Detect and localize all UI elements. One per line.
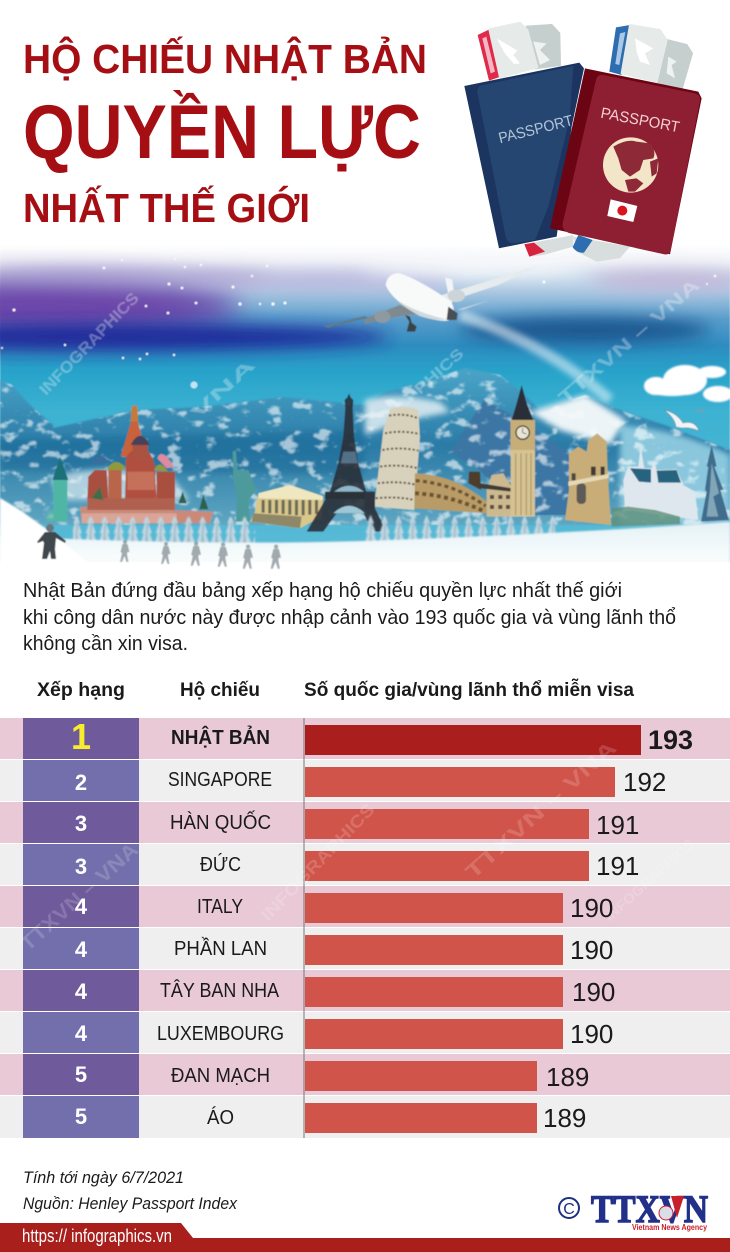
- title: [23, 36, 427, 231]
- visa-free values: 191: [596, 851, 639, 881]
- Eiffel Tower: [307, 393, 387, 532]
- table header: Số quốc gia/vùng lãnh thổ miễn visa: [304, 679, 634, 701]
- pine tree: [701, 445, 729, 522]
- copyright symbol: [559, 1198, 579, 1218]
- banner watermarks: TTXVN – VNA: [555, 275, 703, 408]
- title line 2: QUYỀN LỰC: [23, 90, 421, 175]
- visa-free values: 190: [570, 893, 613, 923]
- footnote: Nguồn: Henley Passport Index: [23, 1194, 237, 1213]
- passport country names: SINGAPORE: [168, 769, 272, 791]
- footnote: Tính tới ngày 6/7/2021: [23, 1168, 184, 1187]
- Parthenon: [250, 485, 323, 528]
- rank numbers: 4: [75, 937, 88, 962]
- visa-free values: 190: [570, 1019, 613, 1049]
- passport country names: [157, 725, 284, 1129]
- title line 3: NHẤT THẾ GIỚI: [23, 185, 310, 231]
- passport country names: ĐAN MẠCH: [171, 1065, 270, 1087]
- St Basil's cathedral: [80, 405, 213, 523]
- rank numbers: 4: [75, 1021, 88, 1046]
- table watermarks: INFOGRAPHICS: [257, 800, 379, 925]
- visa-free values: 189: [546, 1062, 589, 1092]
- blue passport tickets: [478, 23, 573, 257]
- logo TTXVN: [559, 1188, 708, 1232]
- distant snowy mountains: [0, 368, 730, 525]
- rank numbers: 5: [75, 1104, 87, 1129]
- Westminster Abbey: [565, 433, 611, 525]
- airplane: [365, 266, 538, 332]
- banner watermarks: VNA: [187, 355, 259, 423]
- passport country names: ÁO: [207, 1106, 234, 1129]
- Colosseum: [365, 472, 512, 517]
- rank numbers: 3: [75, 854, 87, 879]
- TTXVN wordmark: TTXVN: [591, 1188, 708, 1231]
- red passport tickets: [573, 25, 692, 262]
- visa-free values: 190: [572, 977, 615, 1007]
- passport country names: HÀN QUỐC: [170, 810, 271, 834]
- visa-free values: 189: [543, 1103, 586, 1133]
- rainbow arc: [460, 315, 610, 400]
- visa-free values: 190: [570, 935, 613, 965]
- passport country names: ĐỨC: [200, 853, 241, 876]
- table header: [37, 679, 634, 701]
- Japan flag: [607, 199, 637, 222]
- passport country names: ITALY: [197, 896, 243, 918]
- globe accent: [659, 1196, 684, 1220]
- purple aurora band: [0, 260, 730, 350]
- Statue of Liberty: [233, 450, 257, 522]
- rank numbers: 5: [75, 1062, 87, 1087]
- passport country names: TÂY BAN NHA: [160, 979, 280, 1002]
- left tip of far wing: [323, 316, 368, 328]
- intro paragraph: Nhật Bản đứng đầu bảng xếp hạng hộ chiếu quyền lực nhất thế giới: [23, 580, 622, 602]
- footnote: [23, 1168, 237, 1213]
- Big Ben: [511, 385, 535, 517]
- birds: [664, 408, 706, 431]
- website url: https:// infographics.vn: [22, 1226, 172, 1246]
- visa-free values: 193: [648, 725, 693, 755]
- table header: Xếp hạng: [37, 680, 125, 701]
- rank numbers: 1: [71, 716, 91, 757]
- rank numbers: [71, 716, 91, 1129]
- table watermarks: TTXVN – VNA: [17, 839, 143, 956]
- passports illustration: [464, 23, 702, 262]
- snowy foreground: [0, 498, 730, 580]
- visa-free values: 192: [623, 767, 666, 797]
- green tower: [47, 457, 68, 522]
- passport country names: PHẦN LAN: [174, 937, 267, 960]
- foreground tree line: [73, 515, 555, 547]
- intro paragraph: [23, 580, 676, 655]
- rank numbers: 2: [75, 770, 87, 795]
- intro paragraph: không cần xin visa.: [23, 633, 188, 655]
- passport country names: LUXEMBOURG: [157, 1023, 284, 1045]
- rank numbers: 4: [75, 979, 88, 1004]
- clouds: [644, 365, 730, 402]
- banner watermarks: [37, 275, 703, 423]
- footer bar: [0, 1223, 730, 1252]
- Leaning Tower of Pisa: [374, 407, 420, 510]
- red passport cover: PASSPORT: [599, 105, 682, 136]
- blue passport cover: [464, 63, 584, 248]
- scene: world landmarks banner: [0, 245, 730, 580]
- table watermarks: INFOGRAPHICS: [601, 835, 697, 924]
- globe: [603, 137, 658, 193]
- red passport cover: [550, 68, 702, 254]
- agency name: Vietnam News Agency: [632, 1223, 707, 1232]
- ranking table: [0, 716, 730, 1138]
- banner watermarks: PHICS: [411, 345, 467, 398]
- table watermarks: TTXVN – VNA: [462, 737, 621, 884]
- table header: Hộ chiếu: [180, 680, 260, 701]
- visa-free values: 191: [596, 810, 639, 840]
- axis line: [304, 718, 305, 1138]
- rank numbers: 4: [75, 894, 88, 919]
- stars: [1, 258, 716, 388]
- title line 1: HỘ CHIẾU NHẬT BẢN: [23, 36, 427, 82]
- visa-free values: [543, 725, 693, 1133]
- copyright symbol: C: [563, 1201, 575, 1218]
- row backgrounds: [0, 718, 730, 1138]
- skiers: [37, 524, 281, 569]
- intro paragraph: khi công dân nước này được nhập cảnh vào 193 quốc gia và vùng lãnh thổ: [23, 607, 676, 629]
- rank numbers: 3: [75, 811, 87, 836]
- rank column: [23, 718, 139, 1138]
- banner watermarks: INFOGRAPHICS: [37, 290, 143, 399]
- passport country names: NHẬT BẢN: [171, 725, 270, 749]
- blue passport cover: PASSPORT: [497, 112, 575, 147]
- table watermarks: [17, 737, 697, 956]
- Neuschwanstein castle: [612, 447, 698, 527]
- bars: [305, 725, 641, 1133]
